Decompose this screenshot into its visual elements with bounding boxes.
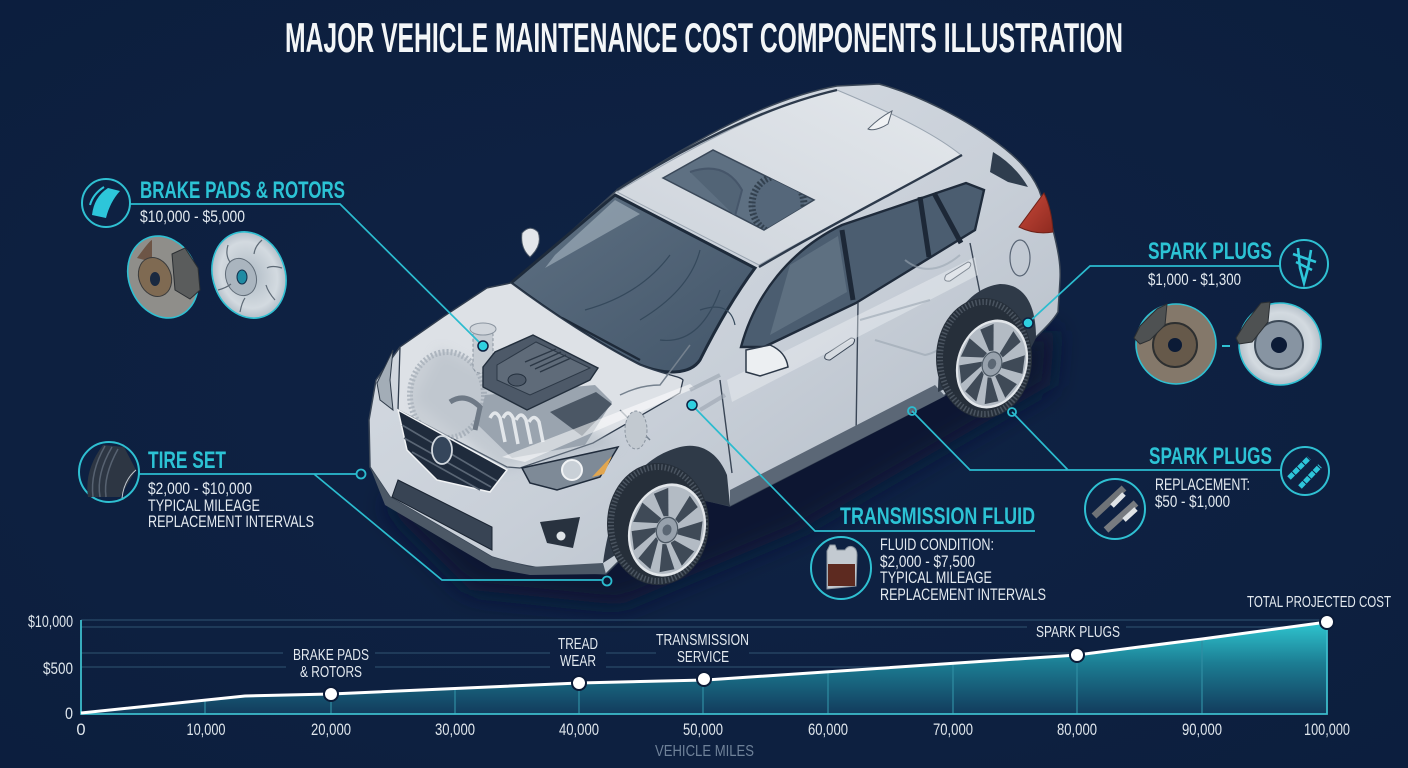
rear wheel arch [938,284,1036,392]
details [148,480,314,531]
callout: tire set [79,442,612,586]
details: REPLACEMENT: [1155,476,1250,494]
heading: SPARK PLUGS [1148,238,1272,265]
gridlines [81,620,1327,667]
milestone labels [293,594,1391,681]
heading: TIRE SET [148,447,226,474]
side windows [741,183,984,347]
see-through wheel in sunroof [690,169,804,234]
worn rotor image [116,225,210,329]
front bumper [370,467,606,575]
brake and fluid lines [620,345,690,440]
roof rails [617,90,962,267]
fuel door [1010,240,1030,276]
seats seen through windshield [585,250,735,340]
side light band [727,257,978,402]
milestone labels: SERVICE [677,649,729,666]
worn rotor image [1134,304,1216,384]
callout: transmission fluid [687,400,1046,604]
window reflection [770,236,847,335]
x axis labels: 90,000 [1182,721,1222,739]
end rings [356,470,612,586]
x axis labels: 10,000 [186,721,226,739]
callout: brake pads and rotors [82,177,488,351]
y axis labels: $500 [43,660,73,678]
photo: two spark plugs [1085,479,1145,539]
chart: projected cost over vehicle miles [28,594,1391,760]
rear window [990,152,1028,187]
engine block [450,385,612,458]
milestone labels: & ROTORS [300,664,362,681]
tail light [1019,193,1053,233]
milestone labels: BRAKE PADS [293,647,369,664]
leader line [1028,266,1280,323]
antenna [868,111,892,130]
heading: BRAKE PADS & ROTORS [140,177,345,204]
leader line [692,405,1035,531]
details: REPLACEMENT INTERVALS [880,586,1046,604]
hood [398,283,683,468]
engine cover [483,335,598,410]
right mirror [746,345,788,376]
leader line to engine bay [130,204,483,346]
inner fender ghost parts [625,411,647,449]
milestone labels: SPARK PLUGS [1036,624,1120,641]
lower intake [392,480,492,550]
end rings [908,407,1016,416]
details: TYPICAL MILEAGE [880,569,992,587]
details: $2,000 - $10,000 [148,480,252,498]
heading: TRANSMISSION FLUID [840,503,1035,530]
front wheel [607,463,716,585]
details: TYPICAL MILEAGE [148,497,260,515]
milestone labels: WEAR [560,653,596,670]
icon: tire [79,442,139,502]
car ground shadow [385,330,1055,605]
rocker panel [730,385,945,506]
details: $2,000 - $7,500 [880,553,975,571]
icon: spark plug assembly [1280,240,1328,288]
y axis labels [28,613,73,723]
x axis labels: 70,000 [933,721,973,739]
marker dot [687,400,697,410]
car body [369,84,1060,574]
wipers [520,292,640,360]
rear mechanical ghost [860,255,965,355]
left headlight [377,350,393,410]
x axis labels: 60,000 [808,721,848,739]
callout: spark plugs lower [908,407,1329,539]
new rotor image [200,221,298,329]
headlight [522,447,618,490]
y axis labels: $10,000 [28,613,73,631]
windshield [511,195,755,372]
area under curve [81,622,1327,714]
milestone markers [324,615,1334,701]
icon: brake pads [82,179,130,227]
rear wheel [936,298,1038,418]
light streaks [502,384,695,462]
x axis title: VEHICLE MILES [655,743,754,760]
x axis labels: 50,000 [683,721,723,739]
separator dash [1222,345,1230,347]
heading: SPARK PLUGS [1149,443,1272,470]
y axis labels: 0 [65,705,73,723]
x axis labels: 40,000 [559,721,599,739]
window pillars [842,193,961,300]
front wheel arch [603,446,730,563]
cost line [81,622,1327,713]
cost: $1,000 - $1,300 [1148,271,1241,289]
x axis labels: 20,000 [311,721,351,739]
vertical ticks [205,639,1202,714]
icon: spark plugs [1281,447,1329,495]
door handles [825,262,971,360]
milestone labels: TRANSMISSION [656,632,749,649]
left mirror [522,228,539,257]
fog lamp [540,517,580,548]
windshield reflection [545,200,640,268]
x axis labels: 30,000 [435,721,475,739]
cost: $10,000 - $5,000 [140,208,245,226]
axes [81,620,1327,714]
x axis labels: 100,000 [1304,721,1350,739]
x axis labels [76,721,1350,739]
new rotor image [1236,302,1321,385]
door seams [720,243,980,473]
milestone labels: TREAD [558,636,598,653]
details: FLUID CONDITION: [880,536,994,554]
grille [398,410,507,492]
leader lines [912,411,1281,470]
vehicle illustration [369,84,1060,585]
marker dot [1023,318,1033,328]
icon: fluid jug [811,537,871,599]
roof panel [617,90,961,265]
sunroof [663,150,814,230]
x axis labels: 0 [76,721,86,739]
callout: spark plugs upper [1023,238,1328,385]
ghost front wheel [410,352,484,438]
grid inside area [1000,622,1327,660]
leader lines [139,474,603,580]
details [1155,476,1250,511]
engine bay shading [415,350,620,470]
details: $50 - $1,000 [1155,493,1230,511]
details: REPLACEMENT INTERVALS [148,513,314,531]
shock absorber [470,323,496,373]
x axis labels: 80,000 [1057,721,1097,739]
marker dot [478,341,488,351]
details [880,536,1046,604]
